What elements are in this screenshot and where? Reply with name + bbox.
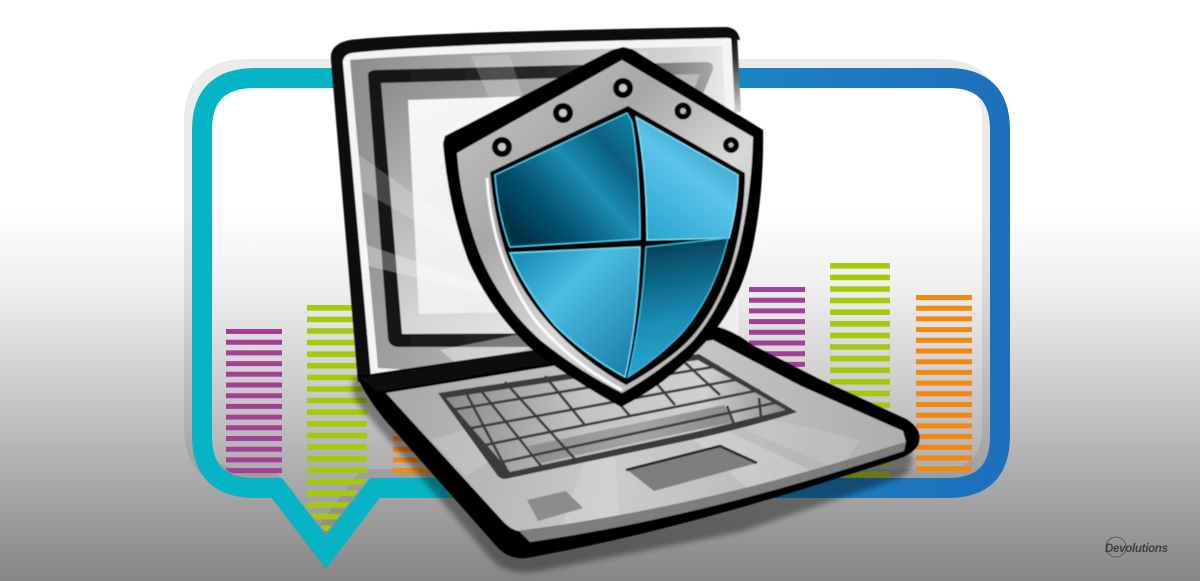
touchpad top edge bbox=[626, 446, 757, 470]
space bar bbox=[528, 405, 734, 463]
deck rays bbox=[432, 420, 858, 524]
rivet 4 bbox=[674, 102, 692, 120]
shield bbox=[443, 47, 763, 407]
keys bbox=[446, 360, 786, 472]
bar: left green bbox=[307, 305, 367, 535]
key grid bbox=[451, 358, 779, 476]
logo ring bbox=[1106, 537, 1126, 557]
speech bubble outline bbox=[202, 78, 1000, 552]
panel: upper right quadrant bbox=[636, 117, 738, 240]
rivet 2 bbox=[553, 103, 573, 123]
bar: left purple bbox=[226, 329, 282, 480]
rivet 1 bbox=[492, 137, 512, 157]
rim highlight bbox=[487, 178, 622, 390]
screen rays bbox=[352, 45, 650, 375]
speech bubble shadow bbox=[194, 69, 992, 543]
bar: left orange bbox=[393, 436, 432, 474]
screen left and top edge bbox=[331, 27, 740, 382]
logo text: Devolutions bbox=[1105, 543, 1168, 555]
panel: lower right quadrant bbox=[628, 238, 728, 377]
laptop shadow bbox=[352, 378, 912, 572]
shield silver rim bbox=[457, 60, 753, 393]
screen frame bbox=[350, 46, 740, 390]
screen right edge bbox=[734, 34, 738, 112]
display bbox=[408, 92, 660, 314]
laptop bbox=[331, 27, 920, 572]
shield black outline bbox=[443, 47, 763, 407]
shield inner black bbox=[490, 106, 745, 385]
bar: right orange bbox=[916, 295, 972, 474]
hinge bbox=[360, 340, 640, 392]
base front lip bbox=[519, 442, 906, 542]
bar: right purple bbox=[749, 287, 805, 367]
keyboard tray bbox=[438, 354, 797, 479]
keyboard bbox=[438, 354, 797, 479]
bar chart: left and right equalizer bars bbox=[254, 263, 944, 535]
laptop base bbox=[357, 326, 920, 558]
logo: Devolutions bbox=[1105, 537, 1168, 557]
base deck bbox=[386, 340, 906, 531]
base outline bbox=[357, 326, 920, 558]
touchpad bbox=[626, 445, 757, 491]
rivet 3 bbox=[613, 78, 633, 98]
small square button bbox=[527, 491, 583, 521]
laptop screen bbox=[331, 27, 740, 400]
bar: right green bbox=[830, 263, 890, 478]
screen body bbox=[340, 34, 738, 400]
screen bezel bbox=[368, 62, 713, 347]
screen inner area bbox=[381, 74, 700, 334]
rivet 5 bbox=[723, 137, 739, 153]
rivets bbox=[492, 78, 739, 157]
panel: upper left quadrant bbox=[495, 113, 640, 247]
panel: lower left quadrant bbox=[510, 247, 640, 377]
